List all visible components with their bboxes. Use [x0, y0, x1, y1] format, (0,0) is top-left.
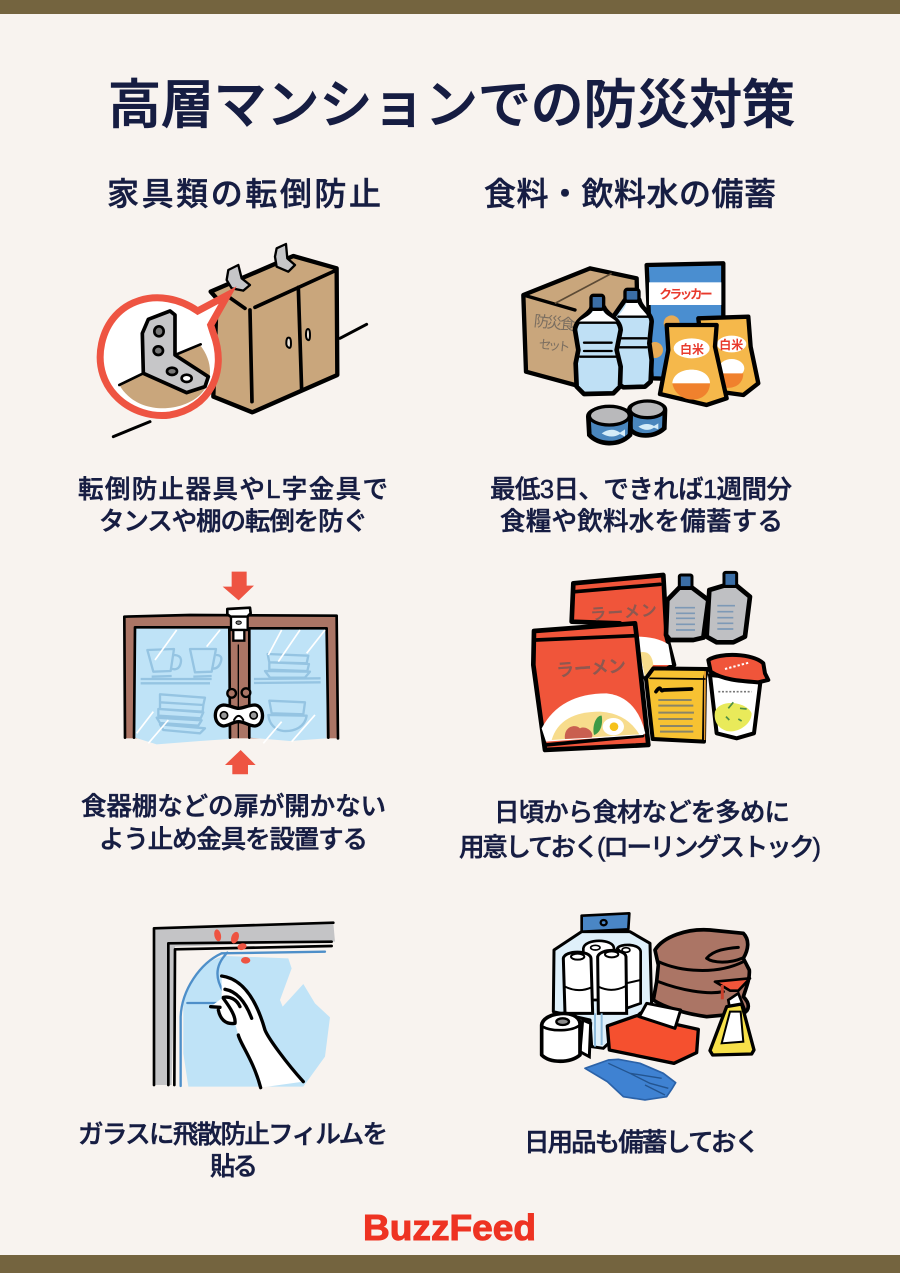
caption: stockpile: 最低3日、できれば1週間分	[490, 476, 792, 504]
cup noodle	[708, 655, 768, 738]
illustration: daily necessities	[542, 913, 754, 1100]
cardboard box: セット	[538, 337, 571, 355]
heading: food and water: 食料・飲料水の備蓄	[484, 176, 776, 212]
bottom band	[0, 1255, 900, 1273]
cupboard frame	[124, 615, 338, 744]
heading: furniture: 家具類の転倒防止	[107, 176, 381, 212]
rubber gloves	[585, 1059, 676, 1100]
door handles and lower latch	[215, 688, 263, 726]
top band	[0, 0, 900, 14]
illustration: cupboard door latch	[124, 572, 338, 774]
caption: door latch: よう止め金具を設置する	[99, 826, 368, 854]
illustration: instant foods	[533, 572, 768, 750]
toilet paper pack	[553, 913, 652, 1048]
red impact marks	[213, 929, 250, 964]
logo: BuzzFeed: BuzzFeed	[363, 1207, 536, 1248]
caption: stockpile	[490, 476, 792, 536]
cardboard box: 防災食	[533, 313, 576, 334]
caption: glass film: ガラスに飛散防止フィルムを	[78, 1121, 388, 1149]
cracker bag: クラッカー	[659, 288, 713, 302]
title: 高層マンションでの防災対策	[108, 76, 795, 135]
cardboard box	[523, 268, 638, 385]
up arrow	[225, 750, 256, 774]
film sheet	[183, 956, 330, 1087]
caption: door latch	[81, 793, 386, 854]
caption: rolling stock: 日頃から食材などを多めに	[494, 799, 790, 827]
front water bottle	[575, 295, 621, 394]
caption: glass film	[78, 1121, 388, 1181]
illustration: food supplies	[523, 263, 758, 443]
down arrow	[223, 572, 254, 600]
grey bottles	[666, 572, 750, 642]
front rice bag: 白米	[680, 342, 704, 357]
window frame	[154, 923, 335, 1085]
caption: daily goods: 日用品も備蓄しておく	[524, 1129, 760, 1157]
rear rice bag: 白米	[719, 337, 743, 352]
rear ramen pack: ラーメン	[590, 602, 657, 624]
caption: stockpile: 食糧や飲料水を備蓄する	[500, 508, 783, 536]
caption: furniture fixing	[78, 476, 388, 536]
front ramen pack	[533, 623, 648, 750]
top latch	[227, 608, 251, 641]
yellow box	[646, 668, 707, 742]
tin cans	[588, 401, 665, 443]
rear ramen pack	[572, 575, 674, 680]
hand	[211, 976, 303, 1088]
spray bottle	[710, 978, 754, 1055]
towels	[653, 930, 749, 1017]
illustration: anti-shatter film on window	[154, 923, 335, 1088]
front rice bag	[660, 325, 727, 405]
cracker bag	[647, 263, 723, 380]
caption: rolling stock	[459, 799, 821, 862]
caption: furniture fixing: 転倒防止器具やL字金具で	[78, 476, 388, 504]
rear rice bag	[698, 317, 758, 395]
tissue box	[607, 1003, 698, 1063]
dishes and cups	[141, 649, 321, 733]
glass highlights	[137, 630, 325, 743]
rear water bottle	[613, 289, 652, 387]
illustration: cabinet with L bracket	[100, 244, 367, 437]
front ramen pack: ラーメン	[556, 656, 627, 681]
caption: glass film: 貼る	[210, 1153, 258, 1181]
single roll	[542, 1013, 591, 1061]
caption: rolling stock: 用意しておく(ローリングストック)	[459, 834, 821, 862]
caption: furniture fixing: タンスや棚の転倒を防ぐ	[99, 508, 368, 536]
caption: door latch: 食器棚などの扉が開かない	[81, 793, 386, 821]
